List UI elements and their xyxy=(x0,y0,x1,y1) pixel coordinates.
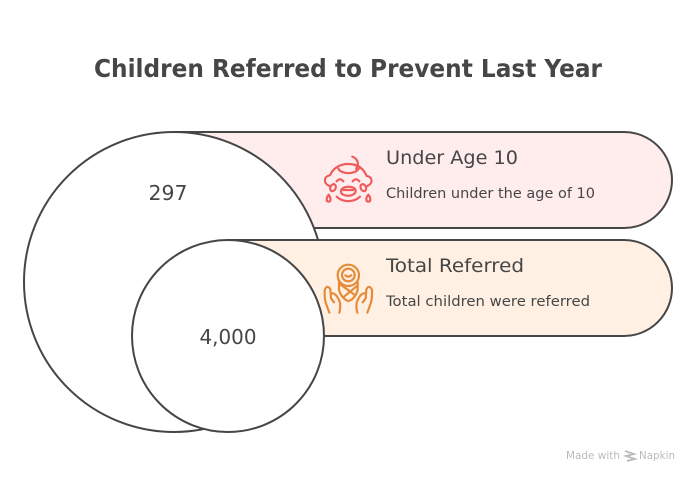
watermark: Napkin xyxy=(639,449,675,462)
text: total referred description: Total children were referred xyxy=(385,294,590,310)
large circle xyxy=(24,132,324,432)
title: Children Referred to Prevent Last Year xyxy=(94,54,603,83)
panel: total referred band xyxy=(228,240,672,336)
heading: under age 10: Under Age 10 xyxy=(386,147,518,169)
panel: under age 10 band xyxy=(174,132,672,228)
value: 4,000: 4,000 xyxy=(200,325,256,349)
value: 297: 297 xyxy=(148,181,188,205)
icon: crying baby xyxy=(325,157,372,202)
text: under age description: Children under the age of 10 xyxy=(386,186,595,202)
watermark xyxy=(566,449,675,462)
heading: total referred: Total Referred xyxy=(385,255,524,277)
small circle xyxy=(132,240,324,432)
icon: swaddled baby in hands xyxy=(325,265,372,313)
watermark: Made with xyxy=(566,449,620,462)
